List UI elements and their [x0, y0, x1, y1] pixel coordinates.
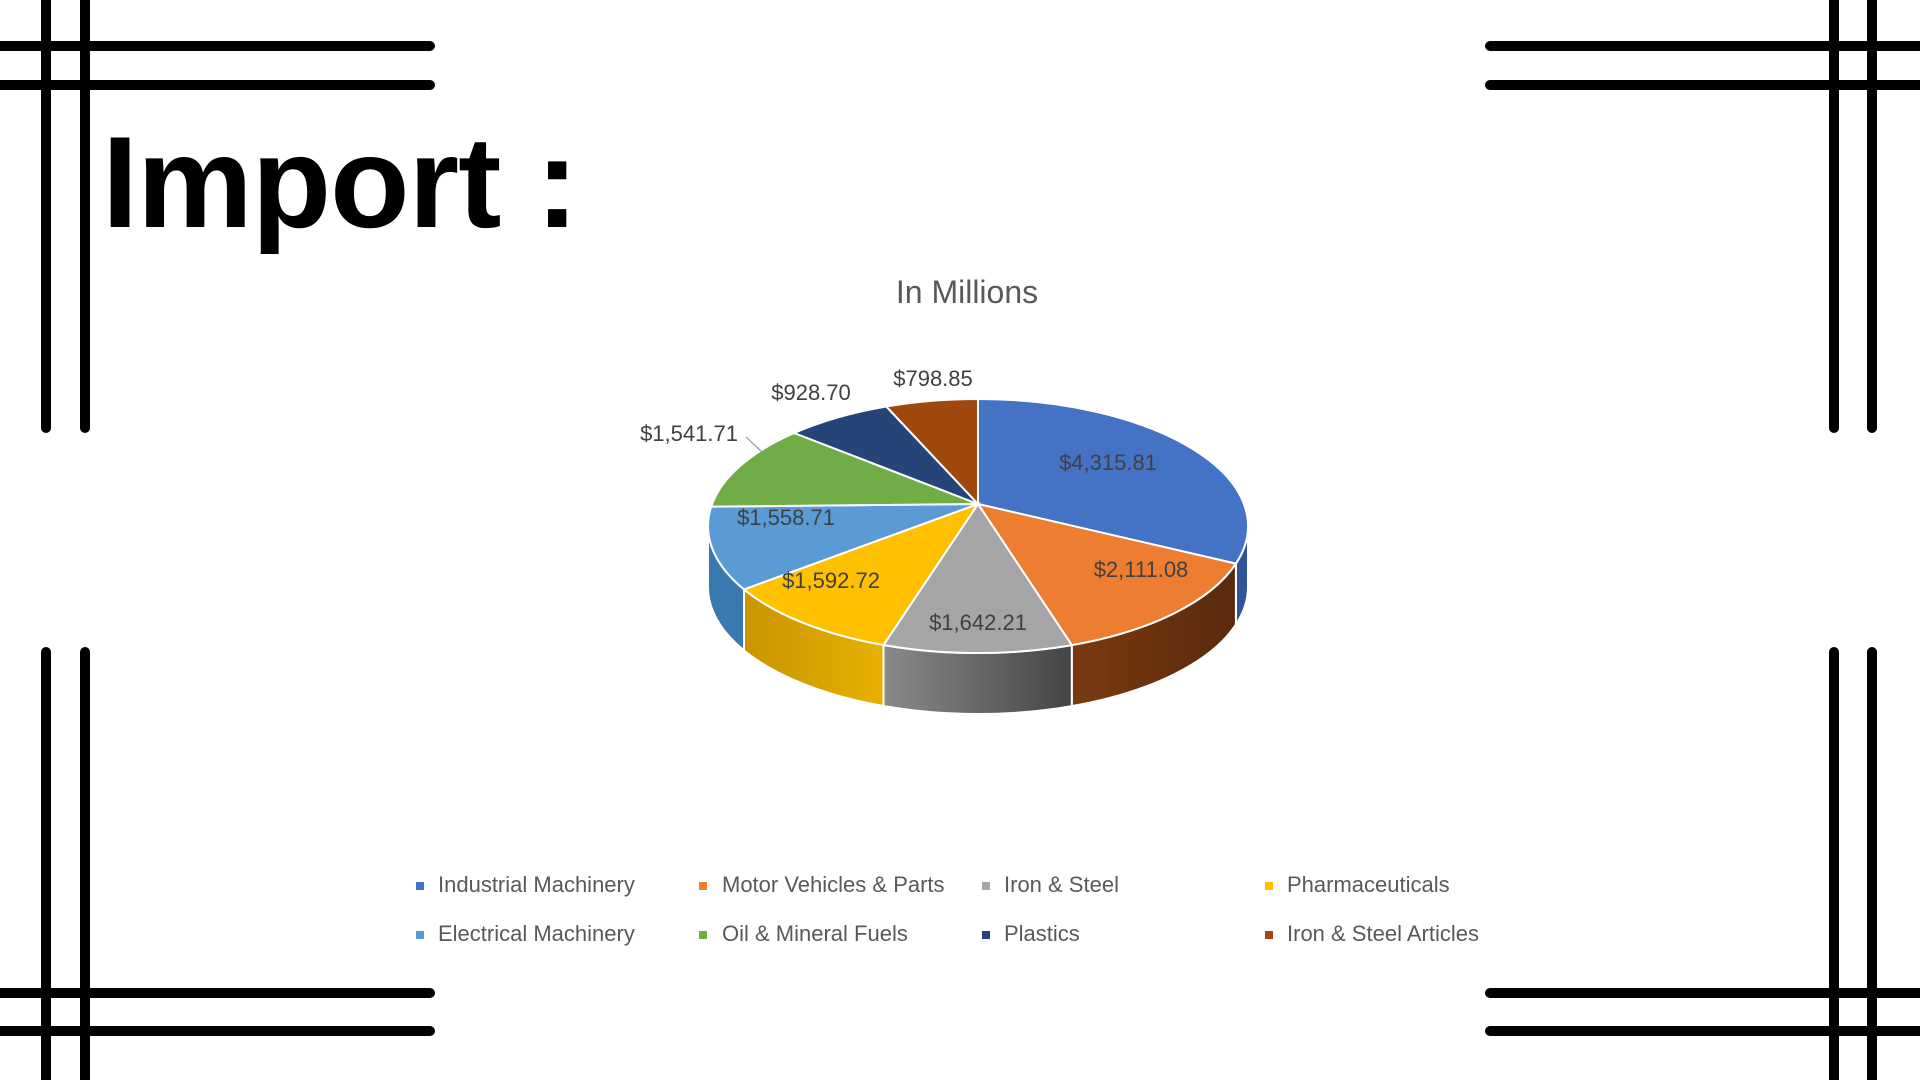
corner: top-right — [1490, 0, 1920, 428]
data labels — [640, 366, 1188, 635]
legend — [416, 872, 1479, 946]
data labels: $2,111.08 — [1094, 557, 1188, 582]
data labels: $4,315.81 — [1059, 450, 1157, 475]
pie sides — [708, 526, 1248, 714]
legend row 1: Industrial Machinery — [438, 872, 635, 897]
legend row 2: Electrical Machinery — [438, 921, 635, 946]
legend row 2: Oil & Mineral Fuels — [722, 921, 908, 946]
legend row 1 — [416, 872, 1450, 897]
corner: bottom-left — [0, 652, 430, 1080]
corner: top-left — [0, 0, 430, 428]
legend row 1: Pharmaceuticals — [1287, 872, 1450, 897]
data labels: $928.70 — [771, 380, 851, 405]
leader line — [746, 437, 762, 452]
chart title: In Millions — [896, 274, 1038, 310]
data labels: $1,541.71 — [640, 421, 738, 446]
legend row 1: Motor Vehicles & Parts — [722, 872, 945, 897]
legend row 1: Iron & Steel — [1004, 872, 1119, 897]
legend row 2: Iron & Steel Articles — [1287, 921, 1479, 946]
legend row 2 — [416, 921, 1479, 946]
legend row 2: Plastics — [1004, 921, 1080, 946]
pie top slices — [708, 399, 1248, 653]
data labels: $1,592.72 — [782, 568, 880, 593]
title: Import : — [102, 109, 578, 255]
pie chart — [708, 399, 1248, 714]
data labels: $1,642.21 — [929, 610, 1027, 635]
data labels: $1,558.71 — [737, 505, 835, 530]
corner: bottom-right — [1490, 652, 1920, 1080]
data labels: $798.85 — [893, 366, 973, 391]
